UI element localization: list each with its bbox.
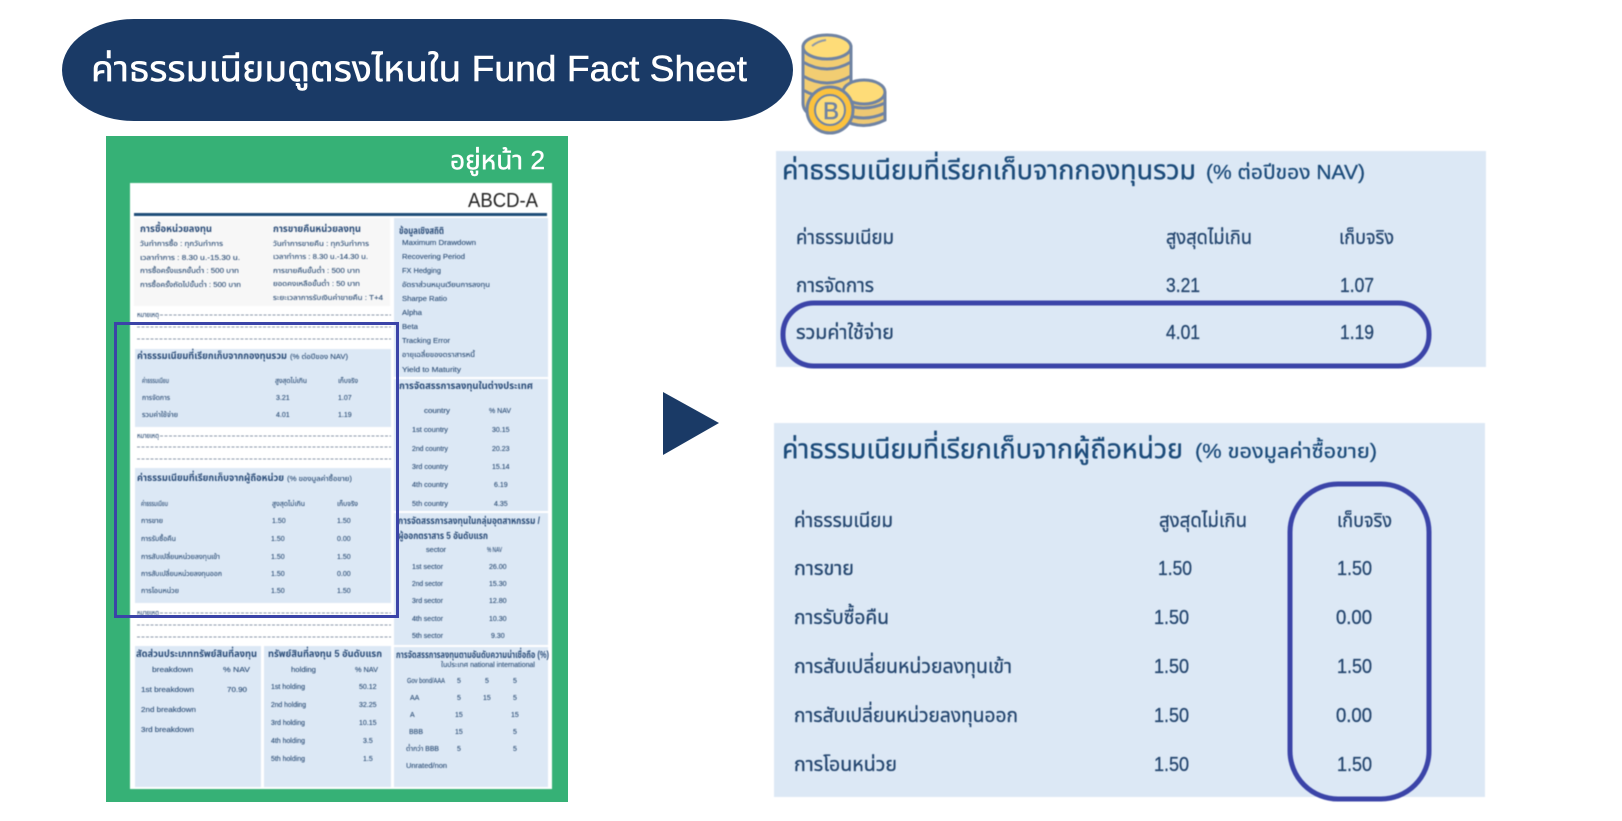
top holdings table: 3rd holding — [271, 720, 305, 727]
mini fund fees table: รวมค่าใช้จ่าย — [142, 410, 178, 419]
top holdings table: % NAV — [355, 667, 378, 674]
sector allocation table: ผู้ออกตราสาร 5 อันดับแรก — [398, 529, 488, 542]
credit rating table: 5 — [513, 729, 517, 736]
row: switch out — [794, 701, 1372, 727]
statistics list: Alpha — [402, 310, 422, 317]
statistics list: อัตราส่วนหมุนเวียนการลงทุน — [402, 280, 490, 290]
table header — [796, 226, 1394, 250]
credit rating table: ในประเทศ national international — [441, 661, 535, 669]
sector allocation table: 5th sector — [412, 633, 444, 640]
row: management: 3.21 — [1166, 275, 1200, 297]
row: switch out: การสับเปลี่ยนหน่วยลงทุนออก — [794, 701, 1018, 727]
sector allocation table: 10.30 — [489, 616, 507, 623]
mini unitholder fees table: 1.50 — [337, 518, 351, 525]
credit rating table: AA — [410, 695, 420, 702]
row: management: 1.07 — [1340, 275, 1374, 297]
asset breakdown table: 70.90 — [227, 687, 247, 694]
statistics list: Tracking Error — [402, 338, 451, 345]
highlight: actual charged column — [1290, 484, 1429, 799]
asset breakdown table: สัดส่วนประเภททรัพย์สินที่ลงทุน — [136, 646, 257, 660]
miniature fact sheet: หมายเหตุ — [137, 312, 159, 320]
statistics list: Sharpe Ratio — [402, 296, 447, 303]
foreign allocation table: country — [424, 408, 451, 415]
foreign allocation table — [399, 379, 533, 508]
redemption info: วันทำการขายคืน : ทุกวันทำการ — [273, 240, 370, 249]
row: switch in: การสับเปลี่ยนหน่วยลงทุนเข้า — [794, 652, 1012, 678]
row: total expenses: 4.01 — [1166, 322, 1200, 344]
purchase info: วันทำการซื้อ : ทุกวันทำการ — [140, 238, 224, 249]
table header — [794, 509, 1392, 533]
mini unitholder fees table: 1.50 — [271, 536, 285, 543]
table header: เก็บจริง — [1339, 227, 1394, 249]
miniature fact sheet — [130, 183, 552, 789]
redemption info: การขายคืนขั้นต่ำ : 500 บาท — [273, 265, 360, 275]
credit rating table: 5 — [513, 678, 517, 685]
mini unitholder fees table: ค่าธรรมเนียม — [141, 499, 168, 508]
top holdings table: 10.15 — [359, 720, 377, 727]
asset breakdown table — [136, 646, 257, 734]
heading: ค่าธรรมเนียมที่เรียกเก็บจากกองทุนรวม — [782, 151, 1196, 186]
top holdings table — [268, 646, 382, 763]
top holdings table: 5th holding — [271, 756, 305, 763]
credit rating table: 5 — [485, 678, 489, 685]
row: transfer: การโอนหน่วย — [794, 753, 897, 776]
mini unitholder fees table: การรับซื้อคืน — [141, 533, 176, 543]
mini unitholder fees table: 1.50 — [272, 518, 286, 525]
row: management: การจัดการ — [796, 275, 874, 297]
mini unitholder fees table — [137, 470, 358, 595]
statistics list: Yield to Maturity — [402, 367, 462, 374]
row: redemption — [794, 603, 1372, 629]
foreign allocation table: 1st country — [412, 427, 449, 434]
miniature fact sheet: ABCD-A — [468, 190, 539, 212]
statistics list: Beta — [402, 324, 418, 331]
asset breakdown table: 2nd breakdown — [141, 707, 196, 714]
sector allocation table — [398, 514, 540, 640]
miniature fact sheet: หมายเหตุ — [137, 610, 159, 618]
mini unitholder fees table: สูงสุดไม่เกิน — [272, 499, 305, 509]
mini unitholder fees table: 1.50 — [271, 554, 285, 561]
sector allocation table: 12.80 — [489, 598, 507, 605]
purchase info — [140, 221, 241, 289]
foreign allocation table: 20.23 — [492, 446, 510, 453]
mini unitholder fees table: 1.50 — [271, 588, 285, 595]
row: switch in — [794, 652, 1372, 678]
foreign allocation table: การจัดสรรการลงทุนในต่างประเทศ — [399, 379, 533, 392]
highlight: fee section on page — [116, 324, 398, 616]
credit rating table: 5 — [457, 678, 461, 685]
mini unitholder fees table: 1.50 — [337, 588, 351, 595]
foreign allocation table: 3rd country — [412, 464, 448, 471]
statistics list: ข้อมูลเชิงสถิติ — [399, 224, 444, 237]
mini fund fees table: การจัดการ — [142, 394, 171, 402]
mini fund fees table: 3.21 — [276, 395, 290, 402]
credit rating table: 5 — [513, 695, 517, 702]
statistics list: FX Hedging — [402, 268, 441, 275]
redemption info: เวลาทำการ : 8.30 น.-14.30 น. — [273, 253, 368, 261]
credit rating table: 15 — [455, 712, 463, 719]
sector allocation table: 9.30 — [491, 633, 505, 640]
credit rating table: 5 — [513, 746, 517, 753]
sector allocation table: 4th sector — [412, 616, 444, 623]
page label: อยู่หน้า 2 — [450, 145, 545, 176]
sector allocation table: 1st sector — [412, 564, 444, 571]
foreign allocation table: % NAV — [489, 408, 511, 415]
top holdings table: 1st holding — [271, 684, 305, 691]
credit rating table: A — [410, 712, 415, 719]
asset breakdown table: 3rd breakdown — [141, 727, 194, 734]
statistics list — [399, 224, 490, 374]
foreign allocation table: 15.14 — [492, 464, 510, 471]
top holdings table: 4th holding — [271, 738, 305, 745]
row: sale: 1.50 — [1337, 558, 1372, 580]
mini unitholder fees table: เก็บจริง — [337, 500, 358, 508]
credit rating table: BBB — [409, 729, 423, 736]
row: switch in: 1.50 — [1154, 656, 1189, 678]
icon: coin stacks: B — [823, 98, 839, 125]
title banner: ค่าธรรมเนียมดูตรงไหนใน Fund Fact Sheet — [91, 48, 747, 90]
row: sale: การขาย — [794, 558, 854, 580]
asset breakdown table: breakdown — [152, 667, 193, 674]
arrow — [663, 392, 719, 455]
credit rating table: ต่ำกว่า BBB — [406, 743, 439, 753]
table header: ค่าธรรมเนียม — [796, 226, 894, 249]
credit rating table: 15 — [511, 712, 519, 719]
credit rating table: 15 — [483, 695, 491, 702]
credit rating table: การจัดสรรการลงทุนตามอันดับความน่าเชื่อถือ (%) — [396, 647, 549, 661]
title banner — [62, 19, 793, 121]
foreign allocation table: 2nd country — [412, 446, 448, 453]
row: redemption: 1.50 — [1154, 607, 1189, 629]
redemption info: ยอดคงเหลือขั้นต่ำ : 50 บาท — [273, 278, 360, 288]
mini fund fees table: ค่าธรรมเนียมที่เรียกเก็บจากกองทุนรวม — [137, 348, 287, 362]
redemption info: การขายคืนหน่วยลงทุน — [273, 222, 361, 235]
statistics list: Recovering Period — [402, 254, 465, 261]
statistics list: อายุเฉลี่ยของตราสารหนี้ — [402, 349, 475, 360]
sector allocation table: 2nd sector — [412, 581, 444, 588]
top holdings table: 2nd holding — [271, 702, 306, 709]
mini fund fees table: สูงสุดไม่เกิน — [275, 376, 307, 386]
table header: เก็บจริง — [1337, 510, 1392, 532]
sector allocation table: 15.30 — [489, 581, 507, 588]
mini unitholder fees table: การโอนหน่วย — [141, 586, 179, 595]
top holdings table: 3.5 — [363, 738, 373, 745]
foreign allocation table: 6.19 — [494, 482, 508, 489]
foreign allocation table: 30.15 — [492, 427, 510, 434]
row: transfer: 1.50 — [1154, 754, 1189, 776]
mini unitholder fees table: การขาย — [141, 518, 163, 525]
row: total expenses — [796, 321, 1374, 344]
row: redemption: 0.00 — [1336, 607, 1372, 629]
top holdings table: holding — [291, 667, 316, 674]
mini unitholder fees table: การสับเปลี่ยนหน่วยลงทุนเข้า — [141, 551, 220, 562]
row: sale — [794, 558, 1372, 580]
subheading: (% ต่อปีของ NAV) — [1206, 161, 1365, 184]
mini fund fees table: 1.07 — [338, 395, 352, 402]
asset breakdown table: 1st breakdown — [141, 687, 194, 694]
purchase info: การซื้อหน่วยลงทุน — [140, 221, 212, 235]
mini unitholder fees table: ค่าธรรมเนียมที่เรียกเก็บจากผู้ถือหน่วย — [137, 470, 284, 484]
row: transfer: 1.50 — [1337, 754, 1372, 776]
panel: fund-level fees — [776, 151, 1486, 367]
foreign allocation table: 4th country — [412, 482, 449, 489]
row: total expenses: 1.19 — [1340, 322, 1374, 344]
top holdings table: 1.5 — [363, 756, 373, 763]
mini unitholder fees table: การสับเปลี่ยนหน่วยลงทุนออก — [141, 568, 222, 579]
credit rating table: Gov bond/AAA — [407, 678, 445, 685]
asset breakdown table: % NAV — [223, 667, 250, 674]
sector allocation table: 3rd sector — [412, 598, 444, 605]
heading: ค่าธรรมเนียมที่เรียกเก็บจากผู้ถือหน่วย — [782, 430, 1183, 465]
row: sale: 1.50 — [1158, 558, 1192, 580]
mini unitholder fees table: 1.50 — [271, 571, 285, 578]
sector allocation table: % NAV — [487, 547, 502, 554]
foreign allocation table: 4.35 — [494, 501, 508, 508]
mini fund fees table: ค่าธรรมเนียม — [142, 376, 169, 385]
subheading: (% ของมูลค่าซื้อขาย) — [1195, 437, 1377, 464]
row: total expenses: รวมค่าใช้จ่าย — [796, 321, 894, 344]
mini unitholder fees table: (% ของมูลค่าซื้อขาย) — [287, 473, 352, 483]
redemption info: ระยะเวลาการรับเงินค่าขายคืน : T+4 — [273, 293, 383, 302]
panel: unitholder fees — [774, 423, 1485, 799]
miniature fact sheet: หมายเหตุ — [137, 433, 159, 441]
panel: fund fact sheet page 2 — [106, 136, 568, 802]
credit rating table — [396, 647, 549, 770]
row: switch out: 1.50 — [1154, 705, 1189, 727]
purchase info: การซื้อครั้งถัดไปขั้นต่ำ : 500 บาท — [140, 279, 241, 289]
mini unitholder fees table: 0.00 — [337, 571, 351, 578]
mini unitholder fees table: 0.00 — [337, 536, 351, 543]
row: redemption: การรับซื้อคืน — [794, 603, 889, 629]
icon: coin stacks — [803, 35, 885, 133]
top holdings table: 50.12 — [359, 684, 377, 691]
mini unitholder fees table: 1.50 — [337, 554, 351, 561]
row: switch in: 1.50 — [1337, 656, 1372, 678]
sector allocation table: การจัดสรรการลงทุนในกลุ่มอุตสาหกรรม / — [398, 514, 540, 527]
row: switch out: 0.00 — [1336, 705, 1372, 727]
table header: สูงสุดไม่เกิน — [1159, 509, 1247, 533]
mini fund fees table: เก็บจริง — [338, 377, 358, 385]
credit rating table: 5 — [457, 746, 461, 753]
foreign allocation table: 5th country — [412, 501, 449, 508]
top holdings table: ทรัพย์สินที่ลงทุน 5 อันดับแรก — [268, 646, 382, 660]
mini fund fees table: 1.19 — [338, 412, 352, 419]
statistics list: Maximum Drawdown — [402, 240, 476, 247]
sector allocation table: 26.00 — [489, 564, 507, 571]
mini fund fees table: 4.01 — [276, 412, 290, 419]
redemption info — [273, 222, 383, 302]
highlight: total expenses — [783, 303, 1429, 366]
row: transfer — [794, 753, 1372, 776]
purchase info: เวลาทำการ : 8.30 น.-15.30 น. — [140, 254, 240, 262]
mini fund fees table — [137, 348, 358, 419]
top holdings table: 32.25 — [359, 702, 377, 709]
row: management — [796, 275, 1374, 297]
sector allocation table: sector — [426, 547, 447, 554]
credit rating table: Unrated/non — [406, 763, 447, 770]
credit rating table: 15 — [455, 729, 463, 736]
table header: ค่าธรรมเนียม — [794, 509, 893, 532]
table header: สูงสุดไม่เกิน — [1166, 226, 1252, 250]
credit rating table: 5 — [457, 695, 461, 702]
mini fund fees table: (% ต่อปีของ NAV) — [290, 352, 348, 361]
purchase info: การซื้อครั้งแรกขั้นต่ำ : 500 บาท — [140, 265, 239, 275]
